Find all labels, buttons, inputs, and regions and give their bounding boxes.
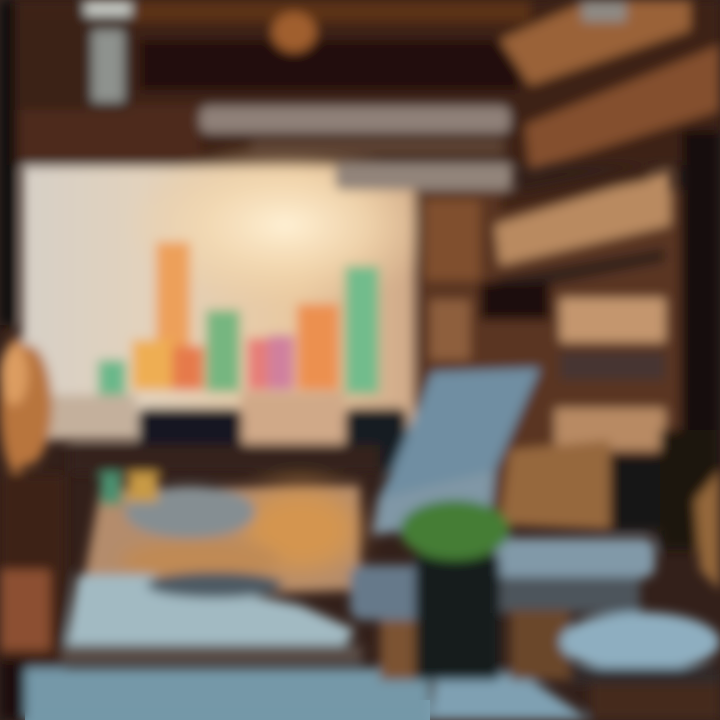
- dark sofa backs: [70, 408, 407, 473]
- left lower wood: [0, 475, 65, 720]
- heading: blurred title text: [200, 106, 513, 190]
- plant pot: [415, 555, 500, 680]
- plant: [400, 500, 510, 560]
- ceiling light fixture: [85, 0, 626, 102]
- left dark column: [0, 0, 15, 325]
- panel: wooden shelves: [418, 165, 680, 530]
- wood panel bottom right: [695, 470, 720, 590]
- blue cushion: [560, 612, 720, 684]
- floor edge: [25, 700, 430, 720]
- panel: table: [62, 485, 362, 663]
- bar chart: [98, 242, 379, 395]
- ceiling: [0, 0, 720, 170]
- dark bookcase column: [610, 130, 720, 550]
- blue armchair: [372, 368, 540, 535]
- right lounge seat: [350, 538, 655, 620]
- objects on table: [100, 472, 283, 598]
- panel: wall: [22, 140, 445, 444]
- floor: [25, 610, 720, 720]
- lamp: [0, 337, 52, 473]
